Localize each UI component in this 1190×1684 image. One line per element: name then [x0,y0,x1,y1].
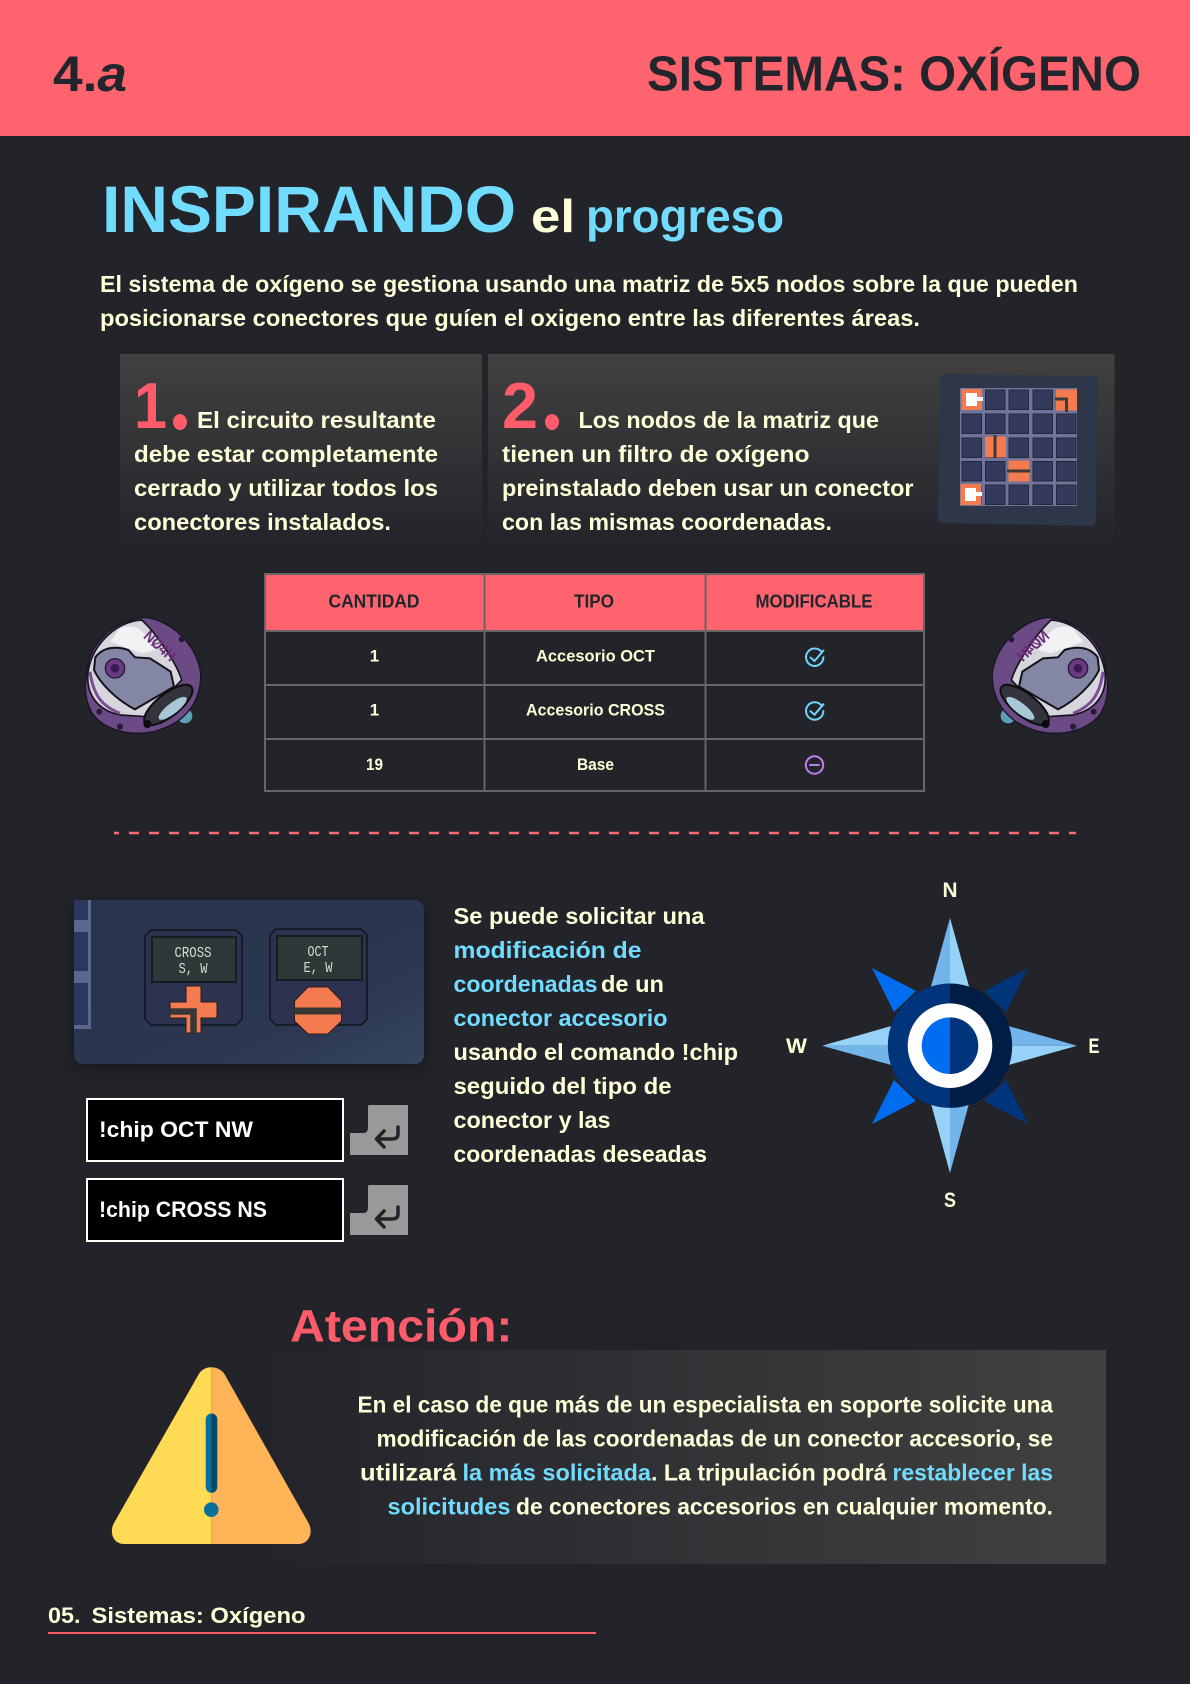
attention text: la más solicitada [462,1460,651,1486]
command box: OCT: !chip OCT NW [99,1117,253,1142]
compass letters [786,879,1100,1212]
icon: enter key [350,1185,408,1235]
intro paragraph [100,271,1078,331]
intro paragraph: El sistema de oxígeno se gestiona usando una matriz de 5x5 nodos sobre la que pueden [100,271,1078,297]
module: cross: CROSS [174,945,212,962]
compass [786,879,1100,1212]
matrix image [938,374,1098,526]
icon: left helmet: NØ4H [140,628,179,665]
attention text: de conectores accesorios en cualquier momento. [516,1494,1053,1520]
row: base [366,755,823,774]
rule 1 text: El circuito resultante [197,407,436,433]
row: base: Base [577,755,614,774]
footer [48,1603,596,1634]
text block: coordinate change: Se puede solicitar una [454,903,705,929]
footer: 05. [48,1603,80,1628]
panel: attention [265,1350,1106,1564]
number 1 [134,369,187,442]
text block: coordinate change: conector y las [454,1107,610,1133]
text block: coordinate change: conector accesorio [454,1005,668,1031]
icon: right helmet: NØ4H [1014,628,1053,665]
icon: right helmet [992,617,1108,733]
rule 1 text: debe estar completamente [134,441,438,467]
row: OCT [370,646,824,666]
main heading: progreso [586,190,784,242]
command box: CROSS: !chip CROSS NS [99,1197,267,1222]
attention text: En el caso de que más de un especialista en soporte solicite una [358,1392,1053,1418]
panel: rule 2 [488,354,1114,546]
section title: SISTEMAS: OXÍGENO [647,48,1141,102]
icon: minus [806,756,823,774]
rule 2 text: preinstalado deben usar un conector [502,475,914,501]
command box: OCT [87,1099,343,1161]
row: CROSS: Accesorio CROSS [526,700,665,720]
footer: Sistemas: Oxígeno [92,1603,306,1628]
module: cross: S, W [178,961,208,978]
attention text [358,1392,1053,1520]
rule 1 text: cerrado y utilizar todos los [134,475,438,501]
icon: enter key [350,1105,408,1155]
text block: coordinate change: de un [601,971,664,997]
command box: CROSS [87,1179,343,1241]
icon: check [806,702,824,720]
rule 1 text: conectores instalados. [134,509,391,535]
cardinal points [822,918,1077,1173]
compass letters: S [944,1189,956,1212]
image: connector panel [74,900,424,1064]
row: OCT: Accesorio OCT [536,646,656,666]
row: OCT: 1 [370,646,379,666]
main heading [102,172,784,246]
module: oct [270,929,367,1034]
rule 2 text: tienen un filtro de oxígeno [502,441,810,467]
row: CROSS [370,700,824,720]
table header row: MODIFICABLE [756,590,872,612]
table header row: TIPO [574,590,614,612]
rule 2 text [502,407,914,535]
row: CROSS: 1 [370,700,379,720]
icon: left helmet [85,617,201,733]
center rings [888,984,1012,1108]
panel: rule 1 [120,354,482,546]
module: oct: E, W [304,960,332,977]
table header row: CANTIDAD [328,590,420,612]
text block: coordinate change: coordenadas [454,971,598,997]
module: oct: OCT [308,944,328,961]
text block: coordinate change: usando el comando !chip [454,1039,738,1065]
section number: 4.a [53,46,127,102]
attention text: . La tripulación podrá [651,1460,887,1486]
attention text: restablecer las [892,1460,1053,1486]
text block: coordinate change: coordenadas deseadas [454,1141,707,1167]
number 2 [502,369,559,442]
text block: coordinate change [454,903,738,1167]
text block: coordinate change: modificación de [454,937,642,963]
main heading: el [531,190,575,242]
text block: coordinate change: seguido del tipo de [454,1073,672,1099]
rule 2 text: Los nodos de la matriz que [578,407,879,433]
attention text: utilizará [360,1460,457,1486]
rule 2 text: con las mismas coordenadas. [502,509,832,535]
header banner [0,0,1190,136]
attention text: modificación de las coordenadas de un conector accesorio, se [376,1426,1053,1452]
diagonal points [872,968,1028,1124]
compass letters: W [786,1035,807,1058]
main heading: INSPIRANDO [102,172,516,246]
module: cross [145,930,242,1033]
heading: attention: Atención: [290,1300,512,1352]
row: base: 19 [366,755,383,774]
compass letters: N [942,879,958,902]
number 2: 2 [502,369,538,442]
intro paragraph: posicionarse conectores que guíen el oxigeno entre las diferentes áreas. [100,305,920,331]
table header row [328,590,872,612]
icon: check [806,649,824,666]
compass letters: E [1088,1035,1100,1058]
icon: warning triangle [112,1367,311,1544]
number 1: 1 [134,369,167,442]
table: connectors [265,574,924,791]
attention text: solicitudes [388,1494,510,1520]
rule 1 text [134,407,438,535]
